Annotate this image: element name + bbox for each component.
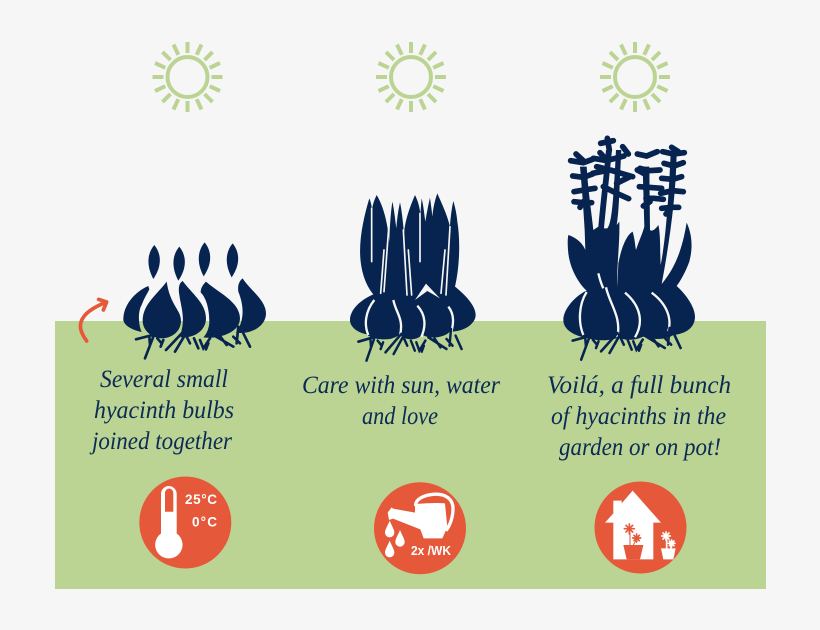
text: step 3 caption xyxy=(547,372,731,461)
text: step 1 caption xyxy=(89,366,234,455)
icon: house with pots badge xyxy=(594,482,686,574)
icon: thermometer badge: 25°C xyxy=(185,492,217,507)
text: step 2 caption xyxy=(302,372,500,430)
text: step 2 caption: and love xyxy=(362,403,438,430)
text: step 1 caption: Several small xyxy=(100,366,228,393)
illustration: sprouting bulbs xyxy=(350,193,476,361)
icon: sun 1 xyxy=(152,42,222,112)
icon: watering can badge xyxy=(374,482,466,574)
text: step 3 caption: Voilá, a full bunch xyxy=(547,372,731,399)
text: step 3 caption: of hyacinths in the xyxy=(551,403,726,430)
text: step 3 caption: garden or on pot! xyxy=(559,434,721,461)
text: step 1 caption: hyacinth bulbs xyxy=(94,397,234,424)
icon: thermometer badge xyxy=(139,476,231,568)
text: step 1 caption: joined together xyxy=(89,428,232,455)
icon: watering can badge: 2x /WK xyxy=(411,543,452,558)
text: step 2 caption: Care with sun, water xyxy=(302,372,500,399)
illustration: small bulbs xyxy=(123,242,266,358)
arrow: pointing to bulbs xyxy=(80,299,107,341)
icon: sun 3 xyxy=(600,42,670,112)
panel: green ground xyxy=(55,321,766,589)
illustration: flowering hyacinths xyxy=(563,138,695,360)
icon: thermometer badge: 0°C xyxy=(192,514,217,530)
icon: sun 2 xyxy=(376,42,446,112)
